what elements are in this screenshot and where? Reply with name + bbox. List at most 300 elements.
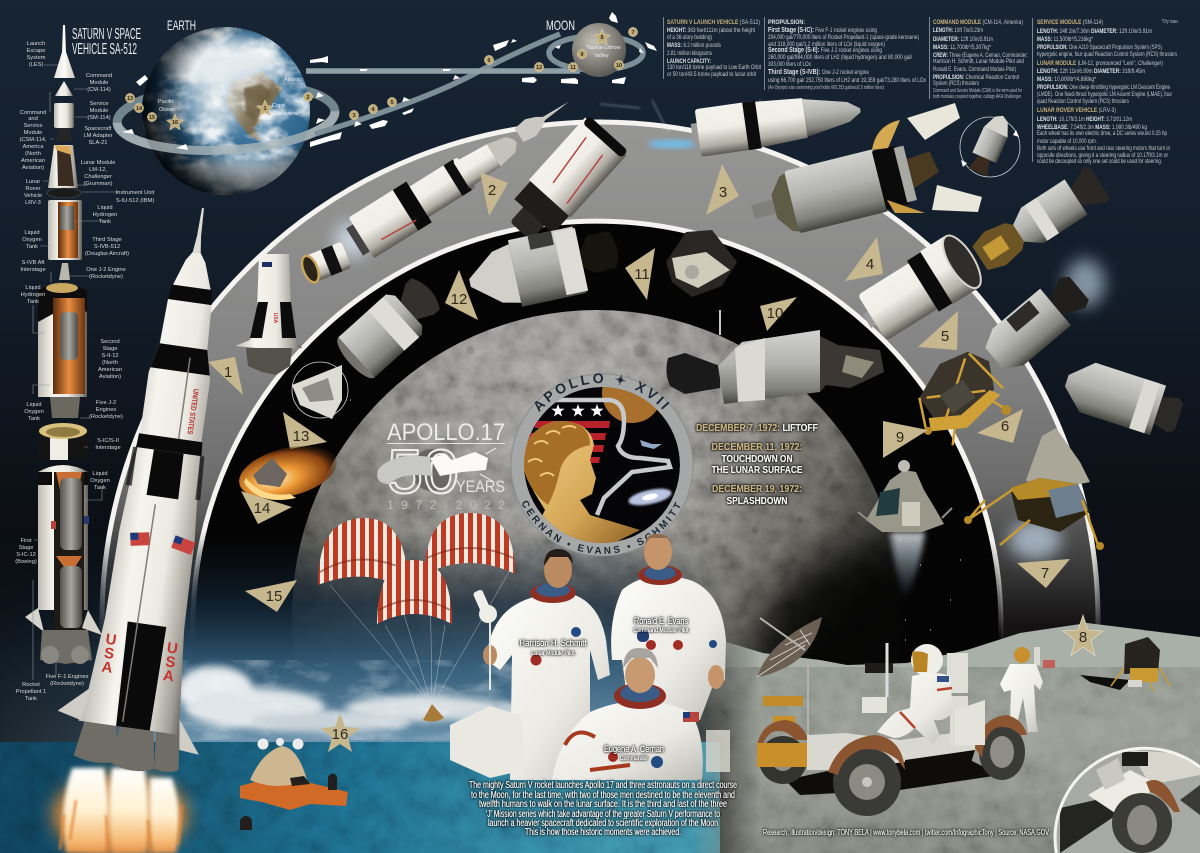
step marker 6: [977, 409, 1023, 443]
rover shadow: [785, 760, 1000, 795]
cutaway labels: (Douglas Aircraft): [85, 251, 129, 257]
step star marker 8: [1063, 615, 1103, 656]
map labels: Valley: [594, 53, 609, 59]
cutaway labels: Liquid: [25, 285, 41, 291]
USA lettering: A: [162, 667, 175, 685]
exploded Saturn V cutaway: [25, 25, 118, 680]
cutaway labels: and: [28, 116, 38, 122]
orbit markers: 13: [127, 96, 133, 102]
apollo 50 years logo: APOLLO.17: [387, 419, 505, 446]
arc white strokes: [102, 122, 1098, 660]
text: propulsion: PROPULSION:: [768, 19, 805, 26]
text: command module: Harrison H. Schmitt, Lunar Module Pilot and: [933, 58, 1024, 65]
step marker 1: 1: [224, 364, 232, 381]
cutaway labels: (Rocketdyne): [50, 681, 84, 687]
control console and mast: [862, 643, 893, 713]
text: propulsion: [764, 17, 927, 91]
step marker 4: 4: [866, 256, 874, 273]
escape tower: [193, 207, 207, 253]
text: Saturn V launch vehicle: LAUNCH CAPACITY:: [667, 58, 711, 65]
cutaway labels: Service: [24, 123, 42, 129]
step marker 9: 9: [896, 429, 904, 446]
mission dates: TOUCHDOWN ON: [722, 453, 792, 465]
map labels: MOON: [546, 17, 575, 33]
cutaway labels: Stage: [103, 346, 117, 352]
LES and capsule cover: [54, 25, 75, 78]
cutaway labels: Tank: [25, 696, 37, 702]
orbit markers: 9: [580, 52, 584, 58]
cutaway labels: S-II-12: [101, 353, 119, 359]
Earth: [142, 27, 310, 195]
text: command module: LENGTH: 10ft 7in/3.23m: [933, 27, 983, 34]
orbit markers: 12: [536, 65, 542, 71]
cutaway labels: Interstage: [20, 267, 46, 273]
cutaway labels: Oxygen: [90, 478, 110, 484]
leader lines: [33, 65, 118, 680]
cutaway labels: Tank: [99, 219, 111, 225]
text: Saturn V launch vehicle: SATURN V LAUNCH VEHICLE (SA-512): [667, 19, 760, 26]
spacecraft: command module turning in circle: [292, 362, 348, 419]
text: Saturn V launch vehicle: [663, 17, 761, 79]
text: command module: [929, 17, 1028, 100]
big Saturn V rocket with flames: [51, 198, 274, 853]
cutaway labels: Command: [20, 110, 46, 116]
fins: [54, 683, 206, 755]
crew name labels: Command Module Pilot: [634, 627, 689, 634]
rocket exhaust flames: [52, 768, 188, 853]
text: Saturn V launch vehicle: 130 ton/118 tonne payload to Low Earth Orbit: [667, 64, 761, 71]
tool in hand: [473, 589, 497, 690]
Earth-to-Moon transit band: [315, 34, 560, 134]
cutaway labels: One J-2 Engine: [86, 267, 126, 273]
cutaway labels: Hydrogen: [21, 292, 45, 298]
mission dates: DECEMBER 11, 1972:: [712, 441, 802, 453]
text: command module: both modules coupled together, callsign AKA Challenger: [933, 94, 1021, 100]
cutaway labels: Liquid: [24, 230, 40, 236]
rover antenna dish: [757, 617, 822, 770]
interstage: [39, 423, 88, 460]
text: Saturn V launch vehicle: or 50 ton/43.5 tonne payload to lunar orbit: [667, 71, 756, 78]
far wheel: [975, 715, 1027, 780]
mission dates: DECEMBER 7, 1972: LIFTOFF: [696, 422, 818, 434]
crew name labels: Lunar Module Pilot: [532, 650, 575, 657]
spacecraft: step 2 second stage stack: [342, 121, 528, 262]
text: command module: System (RCS) thrusters: [933, 80, 980, 87]
spacecraft: CSM docked with LM: [969, 164, 1111, 277]
cutaway labels: Aviation): [22, 165, 44, 171]
step marker 3: 3: [719, 184, 727, 201]
step marker 7: 7: [1041, 565, 1049, 582]
spacecraft: service module before re-entry: [332, 270, 449, 383]
spacecraft: SLA panels: [872, 103, 982, 213]
cutaway labels: S-IC/S-II: [97, 438, 119, 444]
intro paragraph: The mighty Saturn V rocket launches Apollo 17 and three astronauts on a direct course: [469, 780, 737, 791]
cutaway labels: (Rocketdyne): [89, 274, 123, 280]
text: service module, lunar module, rover: LENGTH: 24ft 2in/7.36m DIAMETER: 12ft 10in/3.91m: [1037, 28, 1152, 35]
text: propulsion: First Stage (S-IC): Five F-1 rocket engines using: [768, 25, 877, 34]
text: command module: CREW: Three (Eugene A. Cernan, Commander;: [933, 52, 1028, 59]
cutaway labels: Interstage: [95, 445, 121, 451]
crew name labels: Harrison H. Schmitt: [520, 638, 587, 649]
text: service module, lunar module, rover: [1032, 18, 1178, 165]
cutaway labels: Tank: [28, 416, 40, 422]
step marker 13: [283, 412, 327, 449]
intro paragraph: twelfth humans to walk on the lunar surface. It is the third and last of the three: [479, 799, 727, 810]
left parachute: [318, 518, 408, 590]
spacecraft: separating second stage: [499, 115, 629, 250]
text: propulsion: 260,000 gal/984,000 liters of LH2 (liquid hydrogen) and 80,000 gal/: [768, 54, 912, 61]
text: service module, lunar module, rover: LUNAR ROVER VEHICLE (LRV-3): [1037, 107, 1116, 114]
third stage: [48, 200, 82, 260]
patch ring text: APOLLO ✦ XVII: [534, 373, 670, 412]
spacecraft: step 1 separated first stage: [235, 254, 302, 375]
lunar surface: [660, 623, 1200, 853]
spacecraft: CSM pulling the LM out: [979, 269, 1094, 377]
spacecraft: CSM docked after lunar ascent: [463, 218, 625, 316]
astronaut: Ronald E. Evans: [611, 534, 726, 720]
text: service module, lunar module, rover: quad Reaction Control System (RCS) thrusters: [1037, 98, 1130, 105]
orbit markers: 8: [600, 35, 604, 41]
cutaway labels: Rocket: [22, 682, 40, 688]
orbit markers: 11: [570, 65, 576, 71]
text: service module, lunar module, rover: LENGTH: 22ft 11in/6.99m DIAMETER: 31ft/9.45m: [1037, 68, 1145, 75]
apollo XVII mission patch: CERNAN • EVANS • SCHMITT: [522, 500, 680, 554]
cutaway labels: Command: [86, 73, 112, 79]
map labels: EARTH: [167, 17, 196, 33]
cutaway labels: Engines: [96, 407, 116, 413]
first stage: [38, 465, 89, 632]
step marker 6: 6: [1001, 418, 1009, 435]
map labels: Cape: [272, 103, 285, 109]
moon: [292, 310, 898, 853]
cutaway labels: Tank: [94, 485, 106, 491]
step marker 10: 10: [767, 305, 783, 322]
text: service module, lunar module, rover: LENGTH: 10.17ft/3.1m HEIGHT: 3.71ft/1.12m: [1037, 116, 1132, 123]
step marker 12: [445, 270, 478, 320]
step marker 13: 13: [293, 428, 309, 445]
rover front wheel: [828, 735, 905, 816]
equipment box: [450, 706, 525, 778]
cutaway labels: Rover: [25, 186, 41, 192]
instrument unit: [47, 188, 81, 198]
cutaway labels: Propellant 1: [16, 689, 46, 695]
text: command module: COMMAND MODULE (CM-114, America): [933, 19, 1023, 26]
intro paragraph: [469, 780, 737, 838]
Moon-to-Earth return band: [306, 68, 580, 74]
step marker 5: [918, 311, 958, 350]
cutaway labels: (Rocketdyne): [89, 414, 123, 420]
text: propulsion: 303,000 liters of LOx: [768, 61, 812, 68]
step marker 4: [845, 237, 883, 281]
engine bells: [73, 721, 183, 777]
text: service module, lunar module, rover: motor capable of 10,000 rpm.: [1037, 138, 1097, 145]
mission dates: THE LUNAR SURFACE: [712, 464, 802, 476]
step star marker 8: 8: [1079, 629, 1087, 646]
cutaway labels: Five J-2: [96, 400, 116, 406]
step marker 15: [245, 580, 297, 612]
USA lettering: S: [103, 645, 115, 663]
map labels: Pacific: [158, 99, 174, 105]
cutaway labels: Five F-1 Engines: [46, 674, 89, 680]
cutaway labels: Service: [90, 101, 108, 107]
step marker 11: 11: [634, 266, 650, 283]
fins and F-1 engines: [25, 608, 102, 664]
cutaway labels: (Grumman): [83, 181, 113, 187]
text: Saturn V launch vehicle: of a 36-story building): [667, 34, 712, 41]
white spacecraft silhouettes: [136, 12, 657, 147]
crew name labels: Eugene A. Cernan: [604, 744, 664, 755]
cutaway labels: Vehicle: [24, 193, 42, 199]
spacecraft: LM on lunar ascent with jets: [858, 460, 952, 532]
crew portrait: [450, 534, 730, 780]
mission dates: SPLASHDOWN: [726, 495, 788, 507]
USA lettering: [101, 631, 179, 685]
cutaway labels: (CSM-114,: [19, 137, 47, 143]
star marker 16: 16: [332, 726, 348, 743]
cutaway labels: Module: [24, 130, 42, 136]
service module: [54, 103, 74, 141]
cutaway labels: American: [98, 367, 122, 373]
text: propulsion: 204,000 gal/770,000 liters of Rocket Propellant-1 (space-grade kerosene): [768, 34, 919, 41]
cutaway labels: SLA-21: [89, 140, 107, 146]
cutaway labels: Challenger: [84, 174, 113, 180]
cutaway labels: Oxygen: [24, 409, 44, 415]
command module: [55, 81, 73, 96]
text: service module, lunar module, rover: SERVICE MODULE (SM-114): [1037, 19, 1103, 26]
text: propulsion: and 318,000 gal/1.2 million liters of LOx (liquid oxygen): [768, 41, 885, 48]
astronaut: Harrison H. Schmitt: [473, 549, 610, 780]
Moon: [572, 23, 626, 77]
cutaway labels: [15, 41, 155, 702]
parachutes and capsule: [318, 513, 515, 722]
text: service module, lunar module, rover: *Dry mass: [1162, 19, 1178, 25]
map labels: [158, 17, 621, 117]
cutaway labels: Lunar Module: [81, 160, 115, 166]
crew name labels: [520, 616, 689, 762]
intro paragraph: This is how those historic moments were achieved.: [525, 827, 681, 838]
credit line: Research, illustration/design: TONY BELA | www.tonybela.com | twitter.com/InfographicTony | Source: NASA.GOV: [763, 827, 1049, 837]
intro paragraph: to the Moon, for the last time, with two of those men destined to be the eleventh and: [471, 790, 735, 801]
step marker 7: [1017, 559, 1070, 588]
text: Saturn V launch vehicle: 2.81 million kilograms: [667, 50, 713, 57]
orbit markers: 16: [172, 120, 178, 126]
text: command module: Ronald E. Evans, Command Module Pilot): [933, 66, 1016, 73]
USA lettering: U: [166, 639, 179, 658]
orbit markers: 2: [306, 95, 310, 101]
text: service module, lunar module, rover: MASS: 10,800lb*/4,898kg*: [1037, 76, 1096, 83]
rear gold box: [763, 696, 803, 731]
spacecraft: third stage with docking CSM: [850, 229, 988, 347]
orbit markers: 6: [487, 58, 491, 64]
direction arrows: [122, 39, 644, 150]
map labels: Ocean: [159, 107, 175, 113]
cutaway labels: S-IU-512 (IBM): [116, 198, 154, 204]
step marker 11: [625, 248, 655, 300]
intro paragraph: 'J' Mission series which take advantage of the greater Saturn V performance to: [486, 809, 720, 820]
cutaway labels: Tank: [26, 244, 38, 250]
text: command module: DIAMETER: 12ft 10in/3.91m: [933, 36, 993, 43]
re-entry fireball: [234, 437, 342, 507]
spacecraft: LM descending with gold base: [964, 428, 1104, 550]
spacecraft: jettisoned escape tower: [513, 94, 574, 144]
USA lettering: A: [101, 658, 114, 677]
step marker 3: [706, 164, 739, 215]
cutaway labels: S-IVB-512: [94, 244, 120, 250]
cutaway labels: LM Adapter: [83, 133, 113, 139]
orbit markers: 10: [616, 63, 622, 69]
engine glows and jets: [334, 100, 1105, 600]
apollo 50 years logo: 1 9 7 2 - 2 0 2 2: [387, 498, 505, 512]
mission map: Earth to Moon: [115, 12, 657, 195]
cutaway labels: Liquid: [26, 402, 42, 408]
step marker 1: [208, 357, 243, 395]
Apollo head: [524, 421, 640, 550]
arc band: outer mission path: [102, 122, 1098, 640]
crew name labels: Ronald E. Evans: [634, 616, 688, 627]
cutaway labels: Oxygen: [22, 237, 42, 243]
Moon orbit ring back: [549, 36, 643, 70]
cutaway labels: America: [23, 144, 44, 150]
cutaway labels: LRV-3: [25, 200, 41, 206]
cutaway labels: (LES): [29, 62, 43, 68]
spacecraft: step 1 separated first stage: USA: [272, 313, 278, 324]
text: propulsion: Second Stage (S-II): Five J-2 rocket engines using: [768, 45, 882, 54]
cutaway labels: Lunar: [26, 179, 40, 185]
apollo XVII mission patch: [510, 373, 694, 556]
USA lettering: S: [164, 653, 177, 672]
descending capsule: [423, 704, 444, 722]
spacecraft: CSM turning inside circle: [960, 110, 1020, 178]
ring in front of Earth: [117, 111, 337, 156]
cutaway labels: Tank: [27, 299, 39, 305]
cutaway labels: Second: [100, 339, 120, 345]
flags: [128, 529, 196, 555]
step marker 12: 12: [451, 291, 467, 308]
mission dates: DECEMBER 19, 1972:: [712, 483, 802, 495]
cutaway labels: Liquid: [97, 205, 113, 211]
title: Saturn V: SATURN V SPACE: [72, 26, 141, 43]
map labels: Canaveral: [273, 111, 298, 117]
cutaway labels: American: [21, 158, 45, 164]
text: service module, lunar module, rover: LUNAR MODULE (LM-12, pronounced "Lem", Challenger): [1037, 60, 1163, 67]
spacecraft: LM ascent stage orbit rendezvous: [666, 230, 737, 297]
cutaway labels: Escape: [27, 48, 45, 54]
cutaway labels: Aviation): [99, 374, 121, 380]
map labels: Atlantic: [284, 77, 302, 83]
centre parachute: [377, 560, 452, 624]
right parachute: [425, 513, 515, 574]
cutaway labels: System: [27, 55, 46, 61]
cutaway labels: Spacecraft: [84, 126, 112, 132]
orbit markers: 7: [631, 30, 635, 36]
cutaway labels: S-IC-12: [16, 552, 36, 558]
second stage: [38, 282, 87, 397]
text: command module: MASS: 11,700lb*/5,307kg*: [933, 44, 991, 51]
inset wheel detail: [1055, 748, 1200, 853]
ocean: [0, 742, 720, 853]
text: propulsion: using 66,700 gal/ 252,750 liters of LH2 and 19,359 gal/73,280 liters of LOx: [768, 77, 927, 84]
patch artwork: [524, 387, 680, 543]
orbit markers: 15: [149, 115, 155, 121]
front gold box: [757, 743, 807, 767]
orbit markers: 4: [371, 107, 375, 113]
cutaway labels: Module: [90, 80, 108, 86]
sky with clouds: [0, 530, 720, 742]
text: Saturn V launch vehicle: MASS: 6.2 million pounds: [667, 42, 722, 49]
step marker 2: [480, 172, 508, 216]
text: service module, lunar module, rover: MASS: 11,500lb*/5,216kg*: [1037, 36, 1093, 43]
apollo 50 years logo: [377, 419, 505, 512]
lunar rover vehicle: [757, 617, 1027, 816]
astronaut: Eugene A. Cernan: [552, 648, 703, 780]
step marker 5: 5: [941, 328, 949, 345]
spacecraft: gold lunar module: [897, 340, 1021, 460]
cutaway labels: Stage: [19, 545, 33, 551]
five J-2 engines: [50, 397, 80, 418]
cutaway labels: (SM-114): [87, 115, 111, 121]
cutaway labels: (North: [25, 151, 41, 157]
flag on chair: [706, 730, 730, 772]
rear wheel: [757, 720, 808, 784]
cutaway labels: Hydrogen: [93, 212, 117, 218]
parachute lines: [330, 565, 510, 706]
seated astronaut: [877, 644, 985, 745]
cutaway labels: Liquid: [92, 471, 108, 477]
title: Saturn V: [72, 26, 141, 58]
text: command module: PROPULSION: Chemical Reaction Control: [933, 74, 1019, 81]
cutaway labels: S-IVB Aft: [21, 260, 45, 266]
cutaway labels: (North: [102, 360, 118, 366]
map labels: Taurus-Littrow: [586, 45, 621, 51]
cutaway labels: (CM-114): [87, 87, 111, 93]
cutaway labels: Instrument Unit: [116, 190, 155, 196]
spacecraft: detached command service module: [1059, 356, 1187, 442]
cutaway labels: Third Stage: [92, 237, 122, 243]
splashdown capsule with flotation: [240, 738, 348, 830]
intro paragraph: launch a heavier spacecraft dedicated to scientific exploration of the Moon: [488, 818, 718, 829]
black bands: [136, 283, 225, 456]
step marker 2: 2: [488, 182, 496, 199]
USA lettering: U: [104, 631, 118, 649]
orbit markers: 3: [352, 113, 356, 119]
crew name labels: Commander: [620, 755, 649, 762]
cutaway labels: Module: [90, 108, 108, 114]
ring behind Earth: [115, 78, 337, 156]
SLA adapter with LM: [48, 145, 78, 188]
text: propulsion: (An Olympic-size swimming pool holds 660,253 gallons/2.5 million liters): [768, 85, 884, 91]
step marker 14: [241, 491, 292, 524]
step marker 15: 15: [266, 588, 282, 605]
rocket body: [78, 245, 248, 735]
standing astronaut: [1000, 647, 1055, 732]
orbit markers: [125, 27, 638, 130]
spacecraft: jettisoned interstage ring: [299, 242, 352, 285]
step marker 10: [760, 297, 797, 331]
arc band: inner black space with stars: [193, 221, 1001, 700]
apollo 50 years logo: 50: [387, 438, 459, 507]
cutaway labels: (Boeing): [15, 559, 37, 565]
text: Saturn V launch vehicle: HEIGHT: 363 feet/111m (about the height: [667, 27, 755, 34]
cutaway labels: First: [20, 538, 32, 544]
text: command module: Command and Service Module (CSM) is the term used for: [933, 88, 1022, 94]
cutaway labels: Launch: [27, 41, 45, 47]
spacecraft: big CSM in lunar orbit with LM: [666, 310, 884, 404]
lunar module on surface: [1111, 637, 1170, 692]
spacecraft: step 3 third stage with CSM: [689, 86, 864, 158]
spacecraft: third stage with open SLA: [745, 135, 945, 243]
mission dates: [696, 422, 818, 507]
text: propulsion: Third Stage (S-IVB): One J-2 rocket engine: [768, 67, 869, 76]
